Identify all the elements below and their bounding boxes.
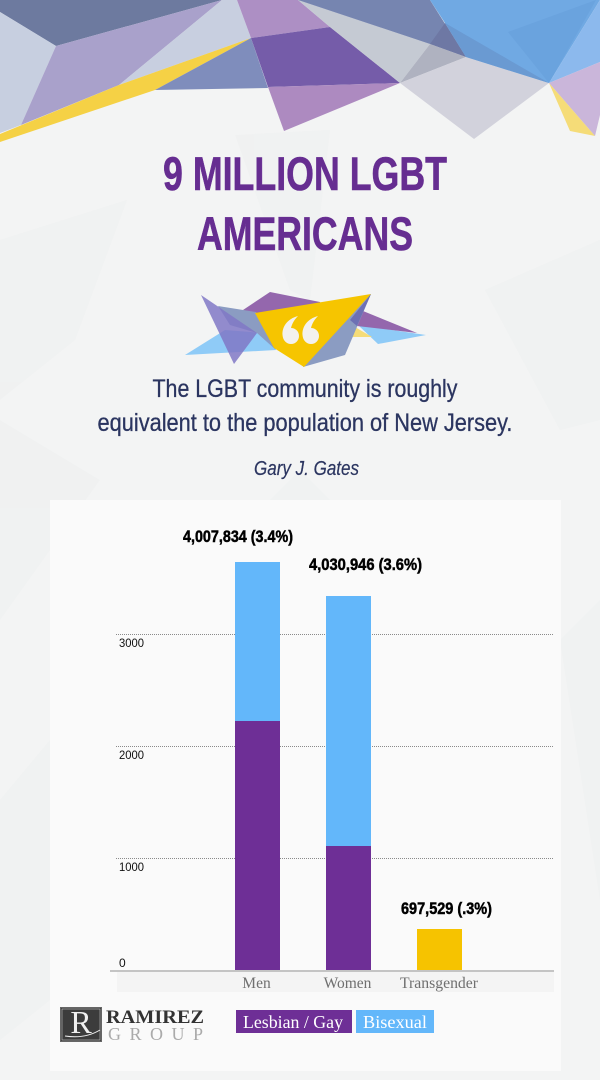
y axis labels: 1000 [119, 860, 144, 874]
quote attribution: Gary J. Gates [254, 458, 359, 480]
header polygon banner [0, 0, 600, 142]
y axis labels [119, 636, 144, 970]
title: 9 MILLION LGBT [163, 147, 447, 200]
title [163, 147, 447, 260]
y axis labels: 3000 [119, 636, 144, 650]
bar: transgender [417, 929, 462, 970]
logo: Ramirez Group: R [70, 1004, 92, 1040]
legend: Bisexual [363, 1012, 427, 1032]
quote text: equivalent to the population of New Jersey. [98, 409, 512, 437]
value labels [183, 527, 492, 918]
icon: quotation mark on polygons [185, 292, 426, 367]
value labels: 697,529 (.3%) [401, 899, 492, 918]
value labels: 4,007,834 (3.4%) [183, 527, 293, 546]
legend [236, 1010, 434, 1033]
y axis labels: 0 [119, 956, 126, 970]
x axis labels: Transgender [400, 975, 479, 992]
bars: women [326, 596, 371, 970]
value labels: 4,030,946 (3.6%) [309, 555, 422, 574]
logo: Ramirez Group: RAMIREZ [106, 1008, 204, 1028]
logo: Ramirez Group [60, 1004, 204, 1044]
x axis labels: Women [324, 975, 372, 992]
quote text [98, 375, 512, 437]
quote text: The LGBT community is roughly [152, 375, 458, 403]
title: AMERICANS [197, 207, 413, 260]
x axis labels [242, 975, 479, 992]
bars: men [235, 562, 280, 970]
legend: Lesbian / Gay [243, 1012, 343, 1032]
logo: Ramirez Group: GROUP [108, 1024, 203, 1044]
x axis labels: Men [242, 975, 271, 992]
y axis labels: 2000 [119, 748, 144, 762]
panel: bar chart [50, 500, 561, 1071]
